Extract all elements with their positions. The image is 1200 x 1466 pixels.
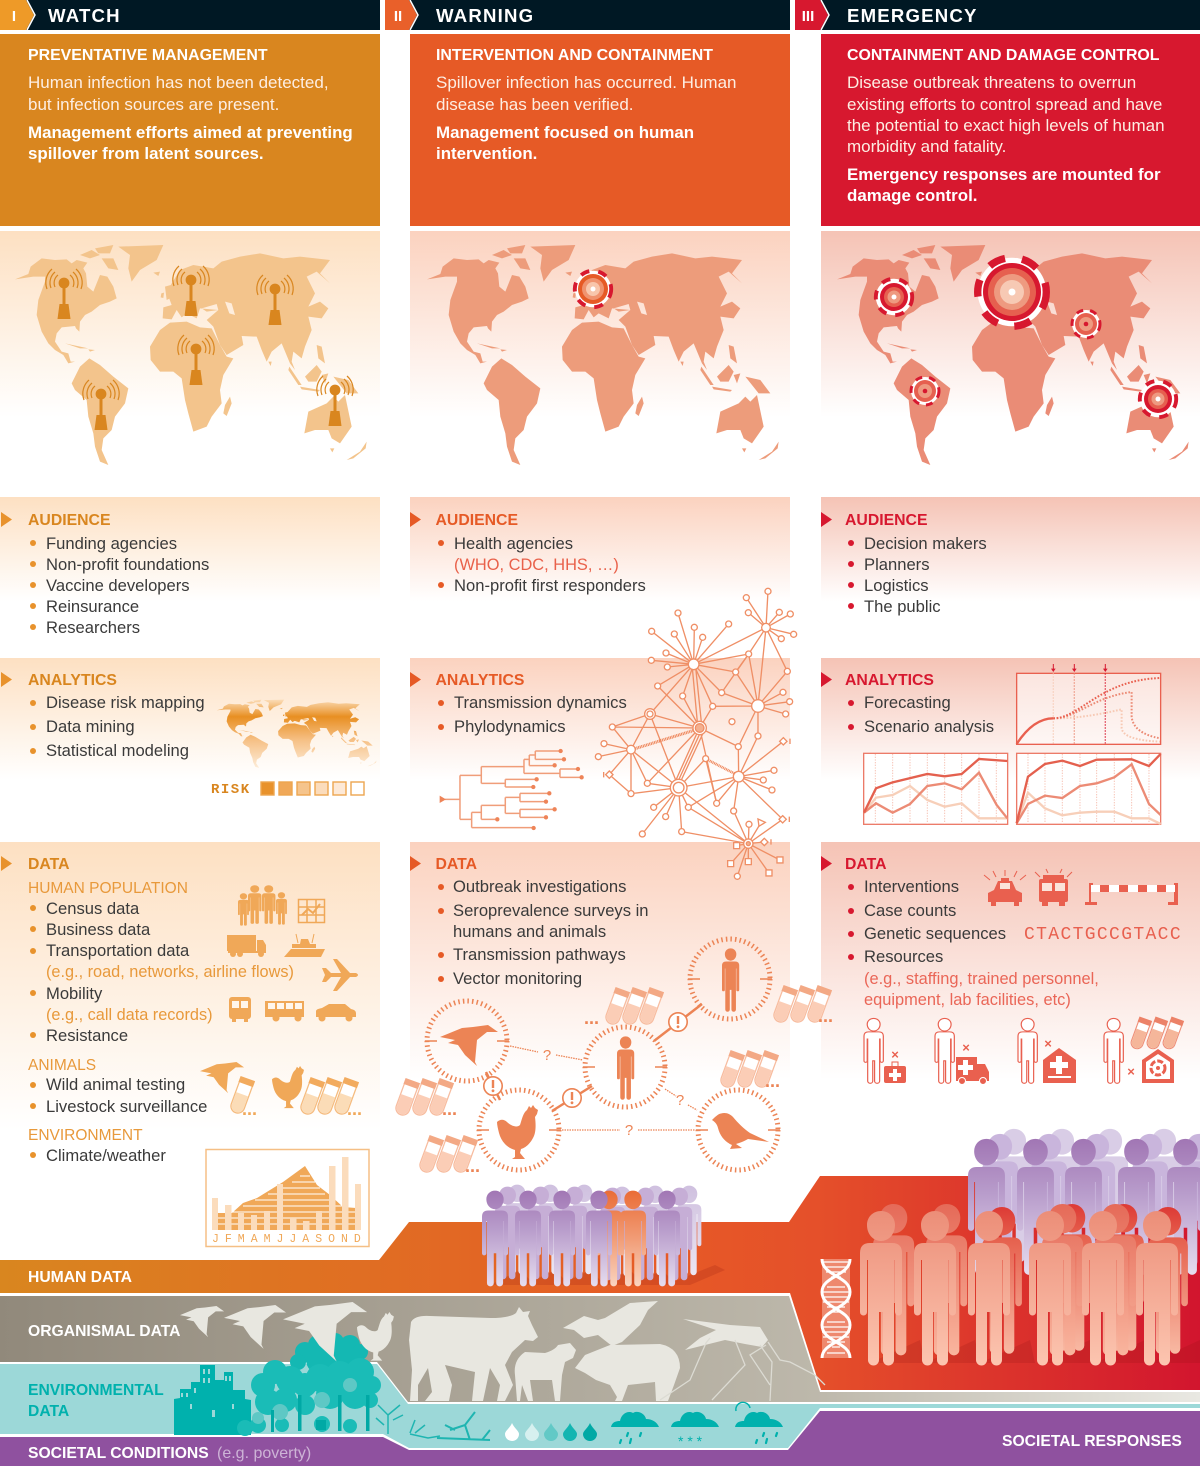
panel: warning analytics: Phylodynamics [454,717,566,736]
risk legend: RISK [211,782,251,798]
panel: watch data: ANIMALS [28,1057,96,1074]
icon: coach [265,1001,304,1022]
human dial top [688,939,772,1019]
panel: warning analytics: Transmission dynamics [454,693,627,712]
animal: pig [575,1344,680,1401]
panel: warning description: disease has been verified. [436,95,634,114]
panel: warning world map with outbreak [410,231,790,490]
icon: outbreak target Europe [575,271,611,307]
panel: watch audience: Researchers [46,618,140,637]
icon: surveillance towers [46,266,353,430]
panel: emergency audience: Decision makers [864,534,987,553]
panel: emergency audience [821,497,1200,642]
icon: family [238,885,287,926]
panel: emergency audience: The public [864,597,941,616]
band: societal conditions and responses: (e.g. poverty) [217,1445,311,1462]
panel: warning data [410,842,790,1172]
panel: watch description [0,34,380,226]
panel: warning data: DATA [436,856,477,873]
panel: warning audience: Health agencies [454,534,573,553]
panel: warning data: Outbreak investigations [453,877,626,896]
crowd: emergency front row [860,1204,1188,1366]
chicken dial [477,1090,561,1170]
shadows under crowds [490,1265,1200,1363]
level tab: III EMERGENCY [795,0,978,30]
panel: watch data: Wild animal testing [46,1075,185,1094]
risk map [217,700,376,768]
icon: truck [227,935,266,957]
icon: wild bird and tube [200,1062,257,1119]
panel: emergency analytics: ANALYTICS [845,672,934,689]
icon: staff and ambulance [935,1018,989,1084]
icon: staff and first aid [864,1018,906,1083]
panel: emergency description: damage control. [847,186,977,205]
chart: scenario right [1017,753,1161,824]
chart: pathway diagram: ? [625,1122,633,1139]
sample tubes: ... [818,1006,833,1026]
panel: watch audience: Funding agencies [46,534,177,553]
environment: trees [237,1333,381,1436]
panel: watch data: Mobility [46,984,103,1003]
panel: emergency data: DATA [845,856,887,873]
panel: warning description: Management focused on human [436,123,694,142]
panel: emergency data: Interventions [864,877,959,896]
icon: staff and ambulance: × [962,1040,970,1055]
icon: data grid map [298,899,325,923]
human dial [583,1027,667,1107]
level tab: III EMERGENCY: III [802,8,814,25]
panel: watch data: Climate/weather [46,1146,166,1165]
panel: watch data: Resistance [46,1026,128,1045]
panel: emergency world map with outbreaks [821,231,1200,490]
panel: warning audience [410,497,790,642]
panel: watch audience: AUDIENCE [28,512,111,529]
panel: watch data: Census data [46,899,140,918]
bird dial [696,1090,780,1170]
panel: watch data: ENVIRONMENT [28,1127,143,1144]
icon: staff and first aid: × [891,1047,899,1062]
icon: police car [984,870,1026,906]
panel: watch data: Transportation data [46,941,190,960]
icon: staff and hospital: × [1044,1036,1052,1051]
panel: emergency data [821,842,1200,1172]
chart: forecast [1017,664,1161,744]
panel: emergency description: the potential to exact high levels of human [847,116,1165,135]
panel: watch audience: Non-profit foundations [46,555,209,574]
band: human data: HUMAN DATA [28,1269,132,1286]
crowd: emergency back row [968,1129,1200,1275]
panel: emergency data: (e.g., staffing, trained personnel, [864,970,1099,988]
icon: staff, samples and biohazard lab [1104,1016,1184,1083]
panel: warning description: Spillover infection has occurred. Human [436,73,736,92]
panel: emergency data: Genetic sequences [864,924,1006,943]
panel: watch audience: Vaccine developers [46,576,190,595]
panel: warning audience: AUDIENCE [436,512,518,529]
level tab: II WARNING: WARNING [436,5,534,26]
panel: emergency description [821,34,1200,226]
panel: warning description [410,34,790,226]
environment: weather clouds [611,1402,783,1449]
icon: barrier [1085,883,1178,905]
band: organismal data: ORGANISMAL DATA [28,1323,181,1340]
icon: staff, samples and biohazard lab: × [1127,1064,1135,1079]
icon: bus [229,997,251,1022]
panel: warning audience: (WHO, CDC, HHS, …) [454,556,619,574]
panel: warning data: Transmission pathways [453,945,626,964]
icon: DNA helix [822,1259,850,1358]
panel: emergency description: morbidity and fatality. [847,137,1006,156]
environment: water drops [505,1423,597,1441]
icon: hen and tubes: ... [347,1099,362,1119]
sample tubes [393,985,833,1176]
band: societal conditions and responses [0,1411,1200,1466]
panel: emergency description: Emergency responses are mounted for [847,165,1161,184]
chart: phylogenetic tree [440,749,584,830]
environment: city [174,1365,251,1435]
panel: warning data: Vector monitoring [453,969,582,988]
animal: bat [563,1301,658,1346]
panel: watch data: DATA [28,856,70,873]
icon: fire truck [1035,869,1072,906]
icon: hen and tubes [272,1066,362,1119]
panel: emergency analytics [821,658,1200,828]
panel: emergency analytics: Forecasting [864,693,951,712]
panel: watch description: PREVENTATIVE MANAGEMENT [28,47,268,64]
panel: watch data: Business data [46,920,151,939]
sample tubes: ... [584,1008,599,1028]
duck dial [425,1001,509,1081]
animal: hen [357,1312,394,1361]
chart: scenario left [864,753,1008,824]
band: environmental data: DATA [28,1403,69,1420]
panel: watch data: (e.g., road, networks, airline flows) [46,963,294,981]
panel: watch data: (e.g., call data records) [46,1006,213,1024]
icon: airplane [322,959,358,991]
panel: emergency audience: Logistics [864,576,929,595]
panel: watch analytics: Disease risk mapping [46,693,205,712]
panel: emergency data: Resources [864,947,943,966]
level tab: I WATCH: I [12,8,16,25]
panel: watch analytics: Data mining [46,717,135,736]
level tab: I WATCH: WATCH [48,5,121,26]
panel: warning data: humans and animals [453,922,606,941]
icon: outbreak targets [876,258,1176,417]
sample tubes: ... [765,1071,780,1091]
level tab: III EMERGENCY: EMERGENCY [847,5,978,26]
panel: warning analytics [410,658,790,828]
panel: watch analytics: Statistical modeling [46,741,189,760]
top header bar [0,0,1200,30]
chart: pathway diagram: ? [543,1047,551,1064]
band: environmental data [0,1364,1200,1448]
risk legend [211,782,364,798]
icon: ship [284,934,325,957]
band: organismal data [0,1296,1200,1402]
panel: watch world map with towers [0,231,380,490]
panel: emergency audience: AUDIENCE [845,512,928,529]
panel: warning data: Seroprevalence surveys in [453,901,649,920]
crowd: warning people [482,1185,701,1286]
panel: watch data: HUMAN POPULATION [28,880,188,897]
level tab: I WATCH [0,0,121,30]
panel: watch data [0,842,380,1242]
icon: wild bird and tube: ... [242,1099,257,1119]
panel: warning analytics: ANALYTICS [436,672,524,689]
panel: warning description: intervention. [436,144,537,163]
panel: watch data: Livestock surveillance [46,1097,207,1116]
animal: sheep [515,1343,576,1401]
panel: watch audience [0,497,380,642]
panel: emergency analytics: Scenario analysis [864,717,994,736]
icon: car [316,1004,356,1022]
panel: emergency description: CONTAINMENT AND DAMAGE CONTROL [847,47,1160,64]
icon: staff and hospital [1018,1018,1076,1083]
panel: warning audience: Non-profit first responders [454,576,646,595]
panel: watch description: spillover from latent sources. [28,144,264,163]
animal: mosquito [660,1319,825,1401]
panel: emergency audience: Planners [864,555,930,574]
panel: warning description: INTERVENTION AND CONTAINMENT [436,47,713,64]
band: human data [0,1176,1200,1390]
chart: pathway diagram: ? [676,1092,684,1109]
panel: emergency data: Case counts [864,901,956,920]
genetic sequence text: CTACTGCCGTACC [1024,925,1182,945]
band: societal conditions and responses: SOCIETAL RESPONSES [1002,1433,1182,1450]
animal: cow [409,1307,538,1401]
environment: weather clouds: * * * [678,1433,703,1449]
chart: climate weather [206,1150,369,1246]
chart: pathway diagram [393,939,833,1176]
panel: watch analytics: ANALYTICS [28,672,117,689]
panel: emergency data: equipment, lab facilities, etc) [864,991,1071,1009]
panel: watch description: Human infection has not been detected, [28,73,329,92]
band: environmental data: ENVIRONMENTAL [28,1382,164,1399]
level tab: II WARNING [385,0,534,30]
sample tubes: ... [442,1099,457,1119]
animals: geese [180,1302,367,1361]
panel: watch analytics [0,658,380,828]
sample tubes: ... [465,1156,480,1176]
alert badges [484,1013,687,1107]
panel: emergency description: existing efforts to control spread and have [847,95,1162,114]
panel: watch description: Management efforts aimed at preventing [28,123,353,142]
level tab: II WARNING: II [394,8,402,25]
panel: watch description: but infection sources are present. [28,95,279,114]
panel: emergency description: Disease outbreak threatens to overrun [847,73,1136,92]
panel: watch audience: Reinsurance [46,597,139,616]
band: societal conditions and responses: SOCIETAL CONDITIONS [28,1445,209,1462]
chart: transmission network [595,588,797,879]
environment: bare trees [376,1405,490,1440]
chart: climate weather: JFMAMJJASOND [212,1233,367,1246]
